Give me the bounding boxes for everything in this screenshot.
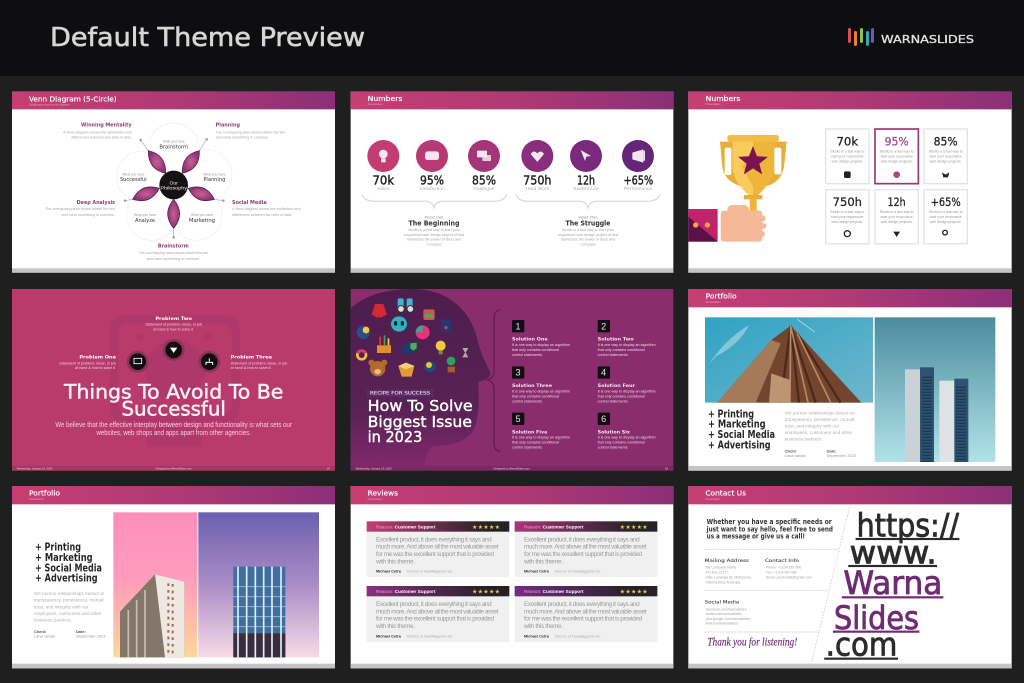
solutions grid: that only contains conditional xyxy=(598,348,645,352)
big URL: Warna xyxy=(843,566,942,602)
review card 3: for me was the excellent support that is provided xyxy=(376,616,494,623)
page background top band xyxy=(0,0,1024,76)
client and date: Date: xyxy=(76,629,86,634)
service list: + Printing xyxy=(35,542,81,554)
panel: Numbers slide with trophy xyxy=(688,92,1012,273)
title: Biggest Issue xyxy=(368,413,472,431)
outer callouts: Planning xyxy=(216,123,240,129)
big URL xyxy=(825,509,959,664)
block: The Struggle: harnesses the power of Sass and xyxy=(561,238,615,242)
problem labels: Problem Two xyxy=(155,316,192,322)
stat card grid: Studio is a fast way to xyxy=(929,210,963,214)
stat card grid: web design projects. xyxy=(881,220,913,224)
service list: + Social Media xyxy=(708,429,775,441)
outer callouts: The overlapping area shows where the two xyxy=(216,130,285,134)
review card 3: Michael Cetra xyxy=(376,634,402,638)
solutions grid: It is one way to display an algorithm xyxy=(512,436,570,440)
review card 4: Reason: Customer Support xyxy=(524,589,584,594)
stat card grid: web design projects. xyxy=(881,159,913,163)
stat card grid: 750h xyxy=(833,195,862,209)
problem labels: Statement of problem, issue, or job xyxy=(145,323,202,327)
solutions grid: that only contains conditional xyxy=(512,394,559,398)
panel: How To Solve slide xyxy=(351,289,673,471)
review card 1: Director of FaceMagazine Inc. xyxy=(407,570,453,574)
description: We pursue relationships based on xyxy=(34,591,105,596)
panel: Numbers slide with circles xyxy=(351,92,673,273)
circle labels: What you have xyxy=(134,213,156,217)
stat card grid: web design projects. xyxy=(930,220,962,224)
solutions grid: that only contains conditional xyxy=(598,394,645,398)
heading: Contact Us xyxy=(705,489,746,498)
mailing address: Victoria 8011 Australia xyxy=(706,580,740,584)
social media: plus.google.com/warnaslides xyxy=(706,617,751,621)
review card 4: with this theme. xyxy=(523,623,563,630)
stat card grid: Studio is a fast way to xyxy=(830,210,864,214)
description: trust, and integrity with our xyxy=(785,424,840,429)
review card 2: much more. And above all the most valuable asset xyxy=(524,544,647,551)
outer callouts: The overlapping area shows where the two xyxy=(138,251,208,255)
review card 4: for me was the excellent support that is provided xyxy=(524,616,642,623)
solutions grid: that only contains conditional xyxy=(512,348,559,352)
big URL: .com xyxy=(826,628,897,664)
circle labels: Analyze xyxy=(135,218,155,224)
subheading: Presentation xyxy=(368,102,383,106)
solutions grid: 3 xyxy=(515,368,520,378)
solutions grid: It is one way to display an algorithm xyxy=(598,343,656,347)
solutions grid: Solution Two xyxy=(598,337,634,343)
heading: Venn Diagram (5-Circle) xyxy=(29,95,117,104)
solutions grid: that only contains conditional xyxy=(512,441,559,445)
heading: Reviews xyxy=(368,489,398,498)
solutions grid: 6 xyxy=(601,414,606,424)
photo: twin blue towers xyxy=(875,317,995,462)
five faint circles xyxy=(116,123,232,240)
solutions grid: It is one way to display an algorithm xyxy=(598,389,656,393)
subheading: Presentation xyxy=(368,497,383,501)
review card 4: Michael Cetra xyxy=(524,634,550,638)
review card 1: for me was the excellent support that is provided xyxy=(376,551,494,558)
description: transparency, persistence, mutual xyxy=(34,598,104,603)
review card 2: ★★★★★ xyxy=(620,524,648,531)
social media: facebook.com/warnaslides xyxy=(706,607,747,611)
review card 4: Excellent product, it does everything it says and xyxy=(524,601,640,608)
stat card grid: start your responsive xyxy=(929,154,962,158)
review card 4: Director of FaceMagazine Inc. xyxy=(555,634,601,638)
big numbers: 85% xyxy=(472,173,496,187)
footer text: Designed by WarnaSlides.com xyxy=(156,467,193,471)
block: The Beginning: Period: Dest xyxy=(425,216,443,220)
solutions grid: It is one way to display an algorithm xyxy=(598,436,656,440)
intro text: us a message or give us a call! xyxy=(707,533,805,541)
solutions grid: control statements. xyxy=(598,399,629,403)
service list: + Marketing xyxy=(708,419,766,431)
heading: Numbers xyxy=(368,94,403,103)
stat card grid: start your responsive xyxy=(831,154,864,158)
big numbers xyxy=(372,173,653,187)
big numbers: 70k xyxy=(372,173,394,187)
footer text xyxy=(356,467,668,471)
social media: Social Media xyxy=(705,600,739,606)
mailing address: Little Lonsdale St, Melbourne, xyxy=(706,575,752,579)
number captions: Sales xyxy=(377,186,390,192)
subheading: Subtitle goes here for this diagram xyxy=(29,102,70,106)
block: The Beginning: Studio is a fast way to start your xyxy=(408,228,461,232)
description: We pursue relationships based on xyxy=(785,410,855,415)
stat card grid: start your responsive xyxy=(880,215,913,219)
logo: WarnaSlides xyxy=(848,28,974,46)
problem labels: Problem Three xyxy=(231,354,272,360)
review card 3: Reason: Customer Support xyxy=(376,589,436,594)
solutions grid: control statements. xyxy=(598,353,629,357)
block: The Beginning: Compass xyxy=(426,243,442,247)
review card 1: much more. And above all the most valuable asset xyxy=(376,544,499,551)
block: The Struggle: Studio is a fast way to start your xyxy=(562,228,615,232)
outer callouts: The overlapping area shows where the two xyxy=(45,207,115,211)
footer text: 18 xyxy=(665,467,668,471)
solutions grid: Solution One xyxy=(512,337,548,343)
client and date: Lana rabato xyxy=(785,453,807,458)
problem labels: at hand & how to solve it. xyxy=(231,366,272,370)
outer callouts: sets have something in common. xyxy=(216,136,269,140)
block: The Struggle: Compass xyxy=(580,243,596,247)
outer callouts: sets have something in common. xyxy=(62,213,115,217)
solutions grid: 5 xyxy=(515,414,520,424)
heading: Numbers xyxy=(706,94,741,103)
stat card grid: Studio is a fast way to xyxy=(880,210,914,214)
subtitle: We believe that the effective interplay between design and functionality is what sets our xyxy=(55,420,292,429)
review card 1: with this theme. xyxy=(375,558,415,565)
service list: + Social Media xyxy=(35,562,102,574)
problem labels: at hand & how to solve it. xyxy=(75,366,116,370)
solutions grid: Solution Four xyxy=(598,383,636,389)
solutions grid: control statements. xyxy=(512,353,543,357)
review card 2: with this theme. xyxy=(523,558,563,565)
outer callouts: differences between two sets of data. xyxy=(232,213,292,217)
review card 3: Director of FaceMagazine Inc. xyxy=(407,634,453,638)
number captions: Hard Work xyxy=(525,186,550,192)
description: transparency, persistence, mutual xyxy=(785,417,854,422)
stat card grid: Studio is a fast way to xyxy=(830,149,864,153)
mailing address: PO Box 21177, xyxy=(706,570,729,574)
solutions grid: Solution Six xyxy=(598,429,630,435)
mailing address: My Company Name xyxy=(706,566,737,570)
outer callouts: A Venn diagram shows the similarities and xyxy=(63,130,132,134)
client and date: Lana rabato xyxy=(34,634,56,639)
outer callouts: Social Media xyxy=(232,200,267,206)
stat card grid: Studio is a fast way to xyxy=(880,149,914,153)
subheading: Presentation xyxy=(29,497,44,501)
description: business partners. xyxy=(34,618,72,623)
stat card grid xyxy=(826,129,967,244)
intro text: Whether you have a specific needs or xyxy=(707,518,832,526)
panel: Things To Avoid slide xyxy=(12,289,335,471)
block: The Beginning xyxy=(404,216,464,247)
heading: Portfolio xyxy=(706,292,737,301)
big numbers: 95% xyxy=(420,173,444,187)
stat card grid: 12h xyxy=(888,195,906,209)
big numbers: +65% xyxy=(623,173,653,187)
solutions grid: 4 xyxy=(601,368,606,378)
solutions grid: Solution Five xyxy=(512,429,547,435)
block: The Beginning: harnesses the power of Sass and xyxy=(407,238,461,242)
review card 3: Excellent product, it does everything it says and xyxy=(376,601,492,608)
social media: twitter.com/warnaslides xyxy=(706,612,742,616)
client and date: Client: xyxy=(785,448,797,453)
subheading: Presentation xyxy=(705,497,721,501)
outer callouts: sets have something in common. xyxy=(147,257,200,261)
contact info: Email: yourEmail@gmail.com xyxy=(766,575,812,579)
description xyxy=(34,591,105,623)
stat card grid: web design projects. xyxy=(831,159,863,163)
block: The Struggle xyxy=(558,216,618,247)
outer callouts: A Venn diagram shows the similarities and xyxy=(232,207,300,211)
subtitle xyxy=(55,420,292,437)
photo: purple sky glass building xyxy=(198,512,319,657)
number captions: Satisfaction xyxy=(419,186,445,192)
curly bracket xyxy=(487,310,500,451)
solutions grid: It is one way to display an algorithm xyxy=(512,343,570,347)
head silhouette xyxy=(351,289,490,466)
stat card grid: start your responsive xyxy=(929,215,962,219)
client and date: Date: xyxy=(827,448,837,453)
stat card grid: 85% xyxy=(934,134,958,148)
main title xyxy=(63,380,283,421)
panel: Contact Us slide xyxy=(688,486,1012,668)
footer text: 16 xyxy=(327,467,330,471)
review card 1 xyxy=(367,521,509,577)
review card 3: with this theme. xyxy=(375,623,415,630)
footer text: Wednesday, January 15, 2020 xyxy=(17,467,53,471)
number captions: Performance xyxy=(624,186,652,192)
stat card grid: web design projects. xyxy=(831,220,863,224)
solutions grid: control statements. xyxy=(512,446,543,450)
stat card grid: 70k xyxy=(836,134,858,148)
description xyxy=(785,410,855,442)
stat card grid: start your responsive xyxy=(880,154,913,158)
thank you note: Thank you for listening! xyxy=(707,636,798,648)
icon circles xyxy=(367,140,654,172)
number captions: Analogue xyxy=(473,186,495,192)
solutions grid: Solution Three xyxy=(512,383,552,389)
centre circle xyxy=(159,171,188,199)
problem labels: Problem One xyxy=(79,354,116,360)
intro text xyxy=(706,518,833,541)
petals xyxy=(133,151,214,228)
description: business partners. xyxy=(785,437,823,442)
number captions: Battery Life xyxy=(573,186,599,192)
title: How To Solve xyxy=(368,397,473,415)
review card 2: Reason: Customer Support xyxy=(524,524,584,529)
logo: WarnaSlides: WARNASLIDES xyxy=(881,33,974,46)
description: employees, customers and other xyxy=(785,430,853,435)
review card 4: ★★★★★ xyxy=(620,589,648,596)
description: trust, and integrity with our xyxy=(34,604,89,609)
solutions grid: that only contains conditional xyxy=(598,441,645,445)
service list: + Advertising xyxy=(708,439,771,451)
footer text: Designed by WarnaSlides.com xyxy=(494,467,531,471)
problem labels: Statement of problem, issue, or job xyxy=(59,361,116,365)
contact info: Contact Info xyxy=(765,558,799,564)
heading: Portfolio xyxy=(29,489,61,498)
problem labels: Statement of problem, issue, or job xyxy=(231,361,287,365)
big numbers: 750h xyxy=(523,173,551,187)
service list xyxy=(35,542,102,585)
review card 2: for me was the excellent support that is provided xyxy=(524,551,642,558)
watermark icon xyxy=(110,315,240,447)
description: employees, customers and other xyxy=(34,611,102,616)
big numbers: 12h xyxy=(577,173,595,187)
intro text: just want to say hello, feel free to send xyxy=(706,525,833,533)
service list: + Advertising xyxy=(35,573,98,585)
circle labels xyxy=(120,140,226,224)
centre circle: Our xyxy=(170,180,178,186)
main title: Things To Avoid To Be xyxy=(63,380,283,403)
panel: Reviews slide xyxy=(351,486,673,668)
icons inside head xyxy=(357,298,468,377)
pointer lines xyxy=(124,138,224,238)
review card 3: ★★★★★ xyxy=(472,589,500,596)
subheading: Presentation xyxy=(706,102,721,106)
big URL: www. xyxy=(850,535,937,571)
problem labels: at hand & how to solve it. xyxy=(153,328,194,332)
big URL: https:// xyxy=(857,509,959,545)
photo: pink sky building xyxy=(113,512,197,657)
circle labels: What you have xyxy=(122,172,145,176)
solutions grid: It is one way to display an algorithm xyxy=(512,389,570,393)
review card 2: Director of FaceMagazine Inc. xyxy=(555,570,601,574)
centre circle: Philosophy xyxy=(160,186,188,192)
subheading: Presentation xyxy=(706,300,721,304)
solutions grid: 2 xyxy=(601,321,606,331)
solutions grid: control statements. xyxy=(598,446,629,450)
circle labels: What you have xyxy=(163,140,185,144)
solutions grid xyxy=(512,320,656,450)
outer callouts: Deep Analysis xyxy=(77,200,115,206)
review card 1: ★★★★★ xyxy=(472,524,500,531)
block: The Beginning: responsive web design project of that xyxy=(404,233,464,237)
social media: linked.in/warnaslides xyxy=(706,622,738,626)
footer text xyxy=(17,467,330,471)
review card 2: Excellent product, it does everything it says and xyxy=(524,536,640,543)
photo: looking up at brown tower xyxy=(705,317,873,403)
circle labels: Successful xyxy=(120,177,147,183)
solutions grid: 1 xyxy=(515,321,520,331)
review card 2 xyxy=(515,521,657,577)
outer callouts: differences between two sets of data. xyxy=(71,136,132,140)
circle labels: What you have xyxy=(203,172,226,176)
review card 4 xyxy=(515,586,657,642)
circle labels: Brainstorm xyxy=(159,144,188,150)
stat card grid: Studio is a fast way to xyxy=(929,149,963,153)
client and date: Client: xyxy=(34,629,46,634)
icon circles xyxy=(127,339,220,373)
solutions grid: control statements. xyxy=(512,399,543,403)
client and date xyxy=(785,448,857,458)
review card 1: Reason: Customer Support xyxy=(376,524,436,529)
circle labels: What you have xyxy=(191,213,213,217)
review card 4: much more. And above all the most valuable asset xyxy=(524,608,647,615)
problem labels xyxy=(59,316,287,370)
title xyxy=(368,397,473,446)
braces xyxy=(362,194,660,208)
stat card grid: +65% xyxy=(931,195,961,209)
client and date: September 2023 xyxy=(76,634,106,639)
subtitle: websites, web shops and apps apart from other agencies. xyxy=(96,428,251,437)
outer callouts xyxy=(45,123,300,261)
social media xyxy=(705,600,751,626)
block: The Struggle: Period: Then xyxy=(578,216,598,220)
block: The Beginning: The Beginning xyxy=(408,219,460,227)
review card 3: much more. And above all the most valuable asset xyxy=(376,608,499,615)
tag: Recipe for success xyxy=(367,389,434,397)
review card 1: Excellent product, it does everything it says and xyxy=(376,536,492,543)
mailing address xyxy=(705,558,752,584)
big URL: Slides xyxy=(834,601,919,637)
outer callouts: Winning Mentality xyxy=(81,123,132,129)
panel: Portfolio slide, blue towers xyxy=(688,289,1012,471)
review card 2: Michael Cetra xyxy=(524,570,550,574)
review card 1: Michael Cetra xyxy=(376,570,402,574)
service list xyxy=(708,408,775,451)
service list: + Marketing xyxy=(35,552,93,564)
panel: Portfolio slide, pink and purple xyxy=(12,486,335,668)
stat card grid: start your responsive xyxy=(831,215,864,219)
title: in 2023 xyxy=(368,428,422,446)
client and date: September 2023 xyxy=(827,453,857,458)
contact info xyxy=(765,558,812,579)
mailing address: Mailing Address xyxy=(705,558,750,564)
stat card grid: 95% xyxy=(885,134,909,148)
service list: + Printing xyxy=(708,408,754,420)
contact info: Phone: +1234 567 890 xyxy=(766,566,801,570)
page title: Default Theme Preview xyxy=(50,23,365,53)
main title: Successful xyxy=(121,398,226,421)
outer callouts: Brainstorm xyxy=(158,244,189,250)
block: The Struggle: The Struggle xyxy=(565,219,611,227)
footer text: Wednesday, January 15, 2020 xyxy=(356,467,392,471)
block: The Struggle: responsive web design project of that xyxy=(558,233,618,237)
panel: Venn diagram slide xyxy=(12,92,335,273)
icon: trophy in hand xyxy=(688,135,787,242)
review card 3 xyxy=(367,586,509,642)
circle labels: Planning xyxy=(203,177,225,183)
number captions xyxy=(377,186,652,192)
circle labels: Marketing xyxy=(189,218,215,224)
client and date xyxy=(34,629,106,639)
contact info: Fax: +1234 567 890 xyxy=(766,570,797,574)
stat card grid: web design projects. xyxy=(930,159,962,163)
tag: Recipe for success: RECIPE FOR SUCCESS xyxy=(370,391,430,397)
